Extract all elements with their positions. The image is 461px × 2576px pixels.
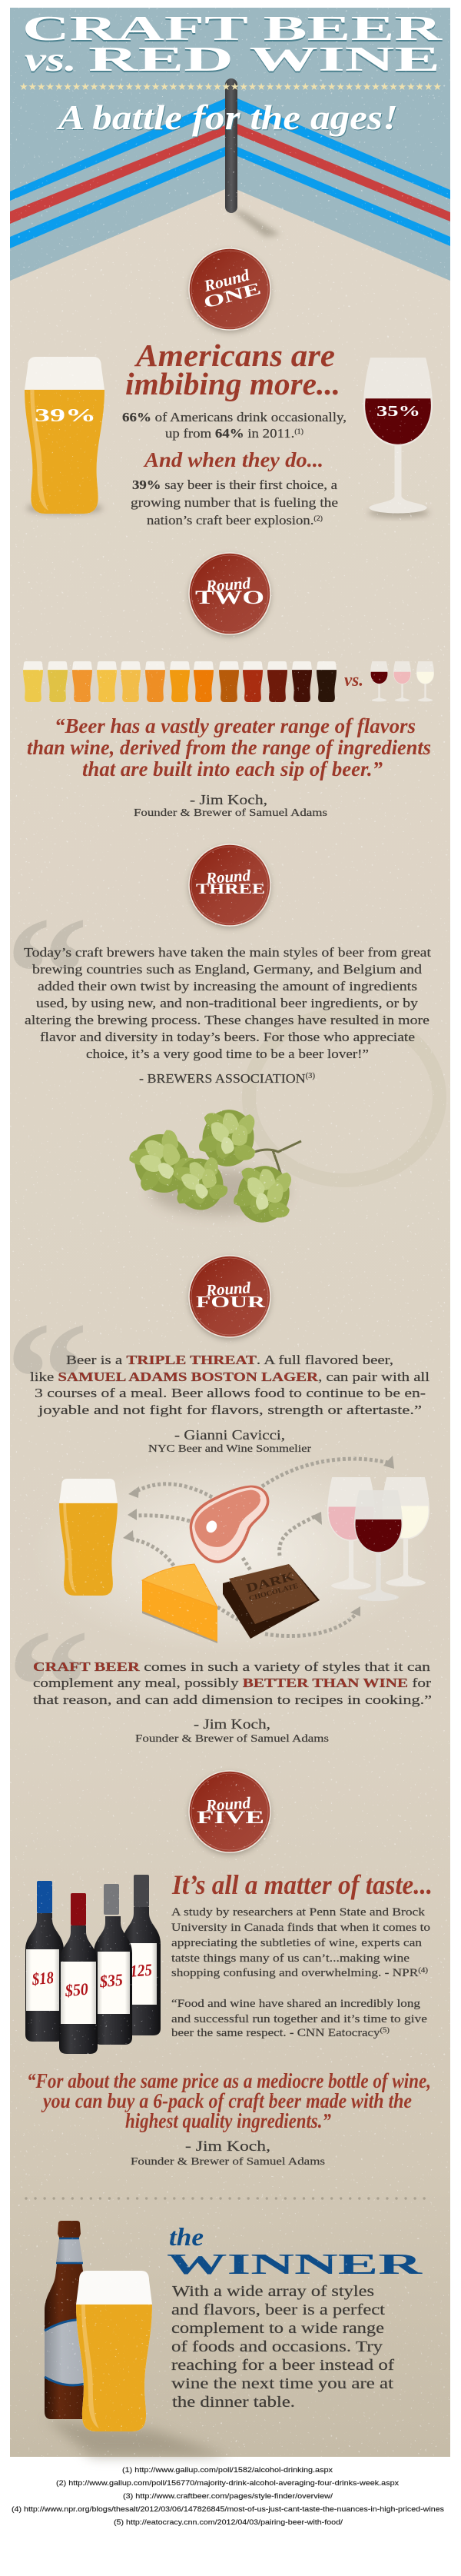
bottom blue rope — [10, 147, 450, 248]
ring backdrop — [10, 8, 450, 281]
quote mark: “ — [5, 1290, 88, 1468]
round three: quote text: - BREWERS ASSOCIATION — [139, 1071, 297, 1086]
round three: quote text: flavor and diversity in today’s beers. For those who appreciate — [40, 1030, 415, 1044]
round two: quote: “Beer has a vastly greater range of flavors — [55, 714, 416, 737]
round five: text — [171, 1869, 433, 2039]
food pairing quote: - Jim Koch, — [194, 1716, 270, 1732]
winner: text: and flavors, beer is a perfect — [171, 2301, 386, 2318]
round two: thirteen beer glasses — [23, 661, 337, 702]
round five: text: It’s all a matter of taste... — [171, 1869, 433, 1900]
wine bottles with prices — [25, 1875, 161, 2054]
title — [22, 9, 443, 78]
food pairing glow — [31, 1453, 430, 1653]
winner: beer glass — [76, 2271, 152, 2431]
header: boxing ring — [10, 8, 450, 281]
round five: text: (5) — [380, 2026, 390, 2035]
winner: text — [167, 2224, 423, 2411]
round one: heading and stats: Americans are — [134, 338, 335, 373]
wine glasses — [327, 1477, 429, 1601]
round five badge — [189, 1771, 270, 1855]
winner: text: the — [169, 2224, 204, 2252]
bottle $35 — [94, 1884, 132, 2045]
round four badge: Round — [204, 1278, 251, 1300]
round two: quote: - Jim Koch, — [190, 792, 267, 807]
food pairing quote: CRAFT BEER comes in such a variety of styles that it can — [33, 1659, 431, 1674]
corner post — [225, 78, 237, 213]
food pairing quote: complement any meal, possibly BETTER THAN WINE for — [33, 1676, 431, 1690]
vs label: vs. — [344, 671, 363, 691]
dark chocolate: DARK — [245, 1570, 297, 1596]
round one: wine glass 35%: 35% — [376, 403, 420, 420]
round four: quote text — [30, 1353, 429, 1454]
bottle $18: $18 — [31, 1968, 55, 1989]
round five badge: Round — [204, 1793, 251, 1815]
round three: quote text: brewing countries such as England, Germany, and Belgium and — [32, 962, 423, 977]
round two: quote — [27, 714, 431, 818]
bottle $18 — [25, 1881, 64, 2042]
red rope — [10, 124, 450, 224]
round two: quote: Founder & Brewer of Samuel Adams — [134, 807, 327, 818]
beer glass — [59, 1479, 118, 1596]
bottle $50 — [59, 1893, 98, 2054]
round three: quote text — [24, 945, 431, 1086]
winner bottle shadow — [46, 2419, 230, 2457]
round three: quote text: Today’s craft brewers have taken the main styles of beer from great — [24, 945, 431, 960]
round five: text: tatste things many of us can’t...making wine — [171, 1952, 410, 1965]
round one: heading and stats: growing number that is fueling the — [131, 495, 338, 510]
round five: text: appreciating the subtleties of wine, experts can — [171, 1937, 423, 1949]
round three: quote text: altering the brewing process. These changes have resulted in more — [25, 1013, 429, 1027]
round five: quote: you can buy a 6-pack of craft beer made with the — [41, 2089, 412, 2112]
title: vs. — [25, 41, 77, 78]
round three badge — [189, 844, 270, 928]
round four: quote text: - Gianni Cavicci, — [174, 1427, 285, 1443]
winner: text: WINNER — [167, 2248, 423, 2281]
round three badge: Round — [204, 866, 251, 887]
round five: text: “Food and wine have shared an incredibly long — [171, 1998, 421, 2010]
round five: quote — [27, 2069, 431, 2167]
post shadow — [230, 209, 280, 237]
round five badge: FIVE — [197, 1808, 264, 1827]
round two: quote: than wine, derived from the range of ingredients — [27, 736, 431, 759]
sources: (3) http://www.craftbeer.com/pages/style-finder/overview/ — [123, 2492, 333, 2501]
quote mark: “ — [5, 884, 88, 1063]
round five: text: shopping confusing and overwhelming. - NPR — [171, 1967, 386, 1979]
round four: quote text: like SAMUEL ADAMS BOSTON LAGER , can pair with all — [30, 1370, 429, 1384]
winner: text: the dinner table. — [172, 2394, 295, 2411]
round one badge: ONE — [201, 278, 263, 312]
round one: beer glass 39%: 39% — [35, 406, 96, 426]
round five: quote: Founder & Brewer of Samuel Adams — [131, 2155, 325, 2167]
dark chocolate: CHOCOLATE — [248, 1582, 299, 1603]
round three badge: THREE — [196, 881, 265, 897]
dotted divider — [26, 2197, 432, 2200]
sources: (4) http://www.npr.org/blogs/thesalt/2012/03/06/147826845/most-of-us-just-cant-taste-the-nuances-in-high-priced-wines — [12, 2505, 444, 2514]
bottle $35: $35 — [98, 1970, 124, 1991]
round two badge — [189, 553, 270, 637]
coffee ring stain — [249, 1014, 439, 1180]
round one: heading and stats: And when they do... — [143, 448, 323, 471]
round four: quote text: NYC Beer and Wine Sommelier — [148, 1443, 312, 1454]
round one: beer glass 39% — [25, 357, 104, 514]
star row: ★★★★★★★★★★★★★★★★★★★★★★★★★★★★★★★★★★★★★★★★★★★★★★★★ — [19, 81, 442, 92]
round one: wine glass 35% — [363, 358, 433, 518]
winner: text: wine the next time you are at — [171, 2375, 394, 2392]
round one: heading and stats: 39% say beer is their first choice, a — [132, 478, 337, 492]
sources: (1) http://www.gallup.com/poll/1582/alcohol-drinking.aspx — [122, 2466, 333, 2474]
bottle $125: $125 — [121, 1960, 153, 1981]
cheese — [142, 1564, 217, 1643]
round five: text: (4) — [418, 1966, 428, 1975]
round three: quote text: used, by using new, and non-traditional beer ingredients, or by — [36, 996, 419, 1010]
round one badge: Round — [201, 265, 251, 295]
subtitle: A battle for the ages! — [56, 98, 398, 137]
round one badge — [189, 248, 270, 332]
food pairing quote: that reason, and can add dimension to recipes in cooking.” — [33, 1692, 432, 1707]
round four: quote text: Beer is a TRIPLE THREAT . A full flavored beer, — [66, 1353, 393, 1367]
winner: beer bottle — [45, 2221, 94, 2419]
food pairing quote: Founder & Brewer of Samuel Adams — [135, 1732, 329, 1744]
quote mark: “ — [7, 1597, 90, 1776]
round one: heading and stats: 66% of Americans drink occasionally, — [122, 410, 347, 424]
winner: text: complement to a wide range — [171, 2320, 384, 2337]
sources: (5) http://eatocracy.cnn.com/2012/04/03/pairing-beer-with-food/ — [114, 2518, 343, 2527]
round four: quote text: 3 courses of a meal. Beer allows food to continue to be en- — [35, 1386, 426, 1400]
round four: quote text: joyable and not fight for flavors, strength or aftertaste.” — [38, 1403, 422, 1417]
round five: quote: highest quality ingredients.” — [125, 2109, 331, 2132]
winner: text: of foods and occasions. Try — [171, 2338, 383, 2355]
bottle $50: $50 — [64, 1979, 89, 2000]
steak — [190, 1486, 269, 1563]
round two badge: Round — [204, 574, 251, 595]
round five: text: University in Canada finds that when it comes to — [171, 1922, 430, 1934]
round five: quote: - Jim Koch, — [185, 2138, 270, 2155]
round four badge — [189, 1256, 270, 1340]
round one: heading and stats: nation’s craft beer explosion. — [147, 513, 298, 528]
round two: quote: that are built into each sip of beer.” — [82, 757, 383, 780]
round four badge: FOUR — [196, 1293, 266, 1311]
sources: (2) http://www.gallup.com/poll/156770/majority-drink-alcohol-averaging-four-drinks-week.aspx — [56, 2479, 399, 2488]
round one: heading and stats: (1) — [294, 428, 303, 435]
winner: text: With a wide array of styles — [172, 2283, 374, 2300]
top blue rope — [10, 98, 450, 201]
pairing arrows — [123, 1456, 394, 1636]
title: CRAFT BEER — [22, 9, 443, 48]
round one: heading and stats: (2) — [313, 514, 323, 522]
food pairing quote — [33, 1659, 432, 1744]
round one: heading and stats — [122, 338, 347, 528]
winner: text: reaching for a beer instead of — [171, 2357, 394, 2374]
round three: quote text: (3) — [306, 1072, 315, 1080]
bottle $125 — [121, 1875, 161, 2035]
sources — [12, 2466, 444, 2527]
round one: heading and stats: imbibing more... — [125, 366, 340, 401]
round five: text: A study by researchers at Penn State and Brock — [171, 1906, 426, 1919]
round two: three wine glasses — [370, 661, 434, 701]
hops — [121, 1104, 301, 1230]
round three: quote text: choice, it’s a very good time to be a beer lover!” — [86, 1047, 369, 1061]
title: RED WINE — [88, 40, 440, 78]
dark chocolate — [223, 1564, 320, 1639]
round one: heading and stats: up from 64% in 2011. — [165, 426, 290, 441]
round five: text: and successful run together and it’s time to give — [171, 2013, 427, 2025]
round two badge: TWO — [195, 587, 264, 608]
round three: quote text: added their own twist by increasing the amount of ingredients — [38, 979, 417, 993]
round five: text: beer the same respect. - CNN Eatocracy — [171, 2027, 356, 2039]
